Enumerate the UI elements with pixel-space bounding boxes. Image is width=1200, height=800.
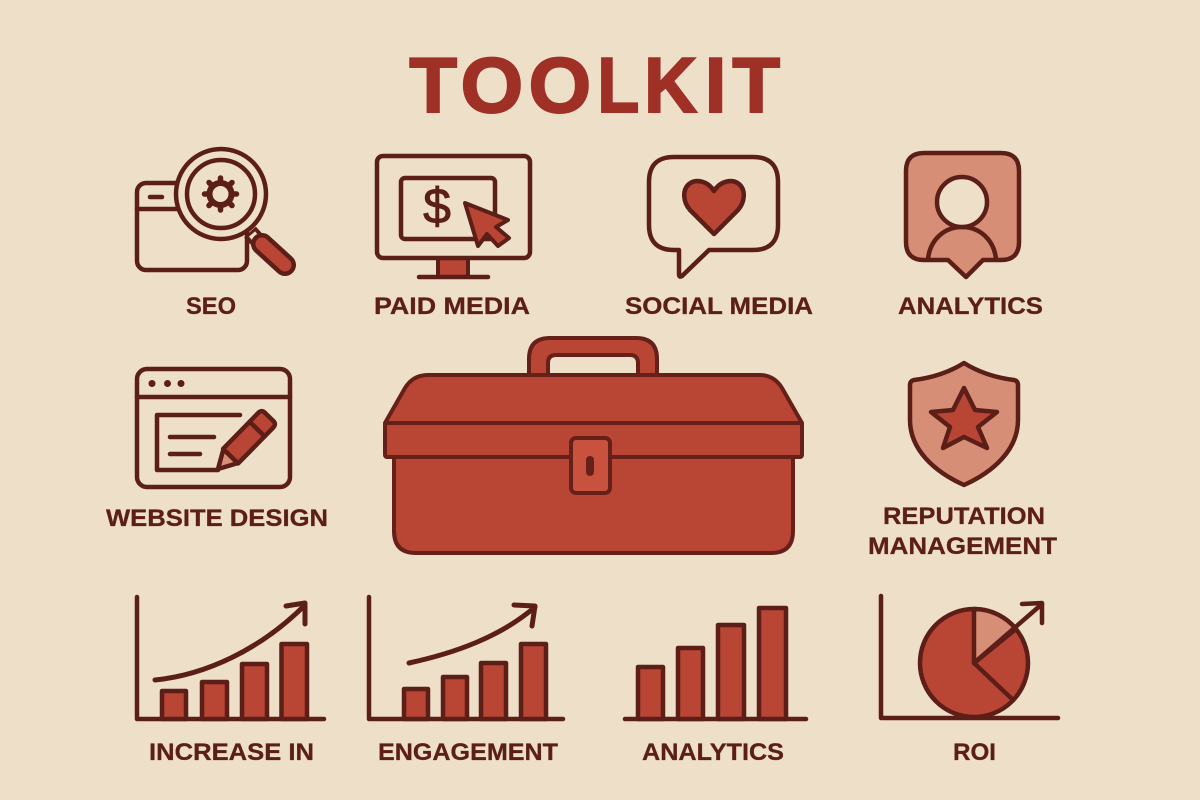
- label: reputation management: MANAGEMENT: [868, 533, 1057, 560]
- title: [409, 41, 780, 129]
- title: O: [529, 41, 591, 129]
- title: T: [409, 41, 457, 129]
- lid: [385, 375, 802, 423]
- label: ROI: ROI: [953, 739, 996, 766]
- icon: user profile pin: [906, 153, 1019, 277]
- label: reputation management: REPUTATION: [883, 503, 1045, 530]
- panel: analytics bars: [625, 608, 806, 766]
- box body: [394, 457, 793, 553]
- label: paid media: PAID MEDIA: [374, 293, 530, 320]
- panel: paid media: [374, 156, 530, 320]
- label: analytics: ANALYTICS: [642, 739, 784, 766]
- label: analytics: ANALYTICS: [898, 293, 1043, 320]
- label: reputation management: [868, 503, 1057, 560]
- panel: reputation management: [868, 363, 1057, 560]
- panel: increase in: [137, 597, 324, 766]
- title: T: [732, 41, 780, 129]
- icon: monitor with dollar and cursor: [377, 156, 530, 277]
- panel: analytics profile: [898, 153, 1043, 320]
- panel: ROI: [881, 596, 1058, 766]
- title: L: [597, 41, 639, 129]
- icon: browser window with pencil: [137, 369, 290, 487]
- label: social media: SOCIAL MEDIA: [625, 293, 813, 320]
- label: increase in: INCREASE IN: [149, 739, 314, 766]
- panel: engagement: [369, 597, 563, 766]
- label: engagement: ENGAGEMENT: [378, 739, 558, 766]
- title: I: [705, 41, 726, 129]
- icon: shield with star: [910, 363, 1018, 485]
- panel: website design: [106, 369, 328, 532]
- lid band: [385, 423, 802, 457]
- title: O: [461, 41, 523, 129]
- icon: SEO magnifier over browser window: [137, 149, 285, 270]
- panel: social media: [625, 157, 813, 320]
- chart: rising bars with arrow: [369, 597, 563, 719]
- chart: pie with arrow: [881, 596, 1058, 718]
- handle: [529, 338, 657, 375]
- latch: [571, 438, 610, 493]
- chart: bar chart: [625, 608, 806, 719]
- icon: speech bubble with heart: [649, 157, 778, 277]
- label: SEO: SEO: [186, 293, 236, 320]
- panel: SEO: [137, 149, 285, 320]
- illustration: toolbox: [385, 338, 802, 553]
- chart: rising bars with arrow: [137, 597, 324, 719]
- title: K: [644, 41, 697, 129]
- icon: monitor with dollar and cursor: $: [423, 178, 451, 234]
- label: website design: WEBSITE DESIGN: [106, 505, 328, 532]
